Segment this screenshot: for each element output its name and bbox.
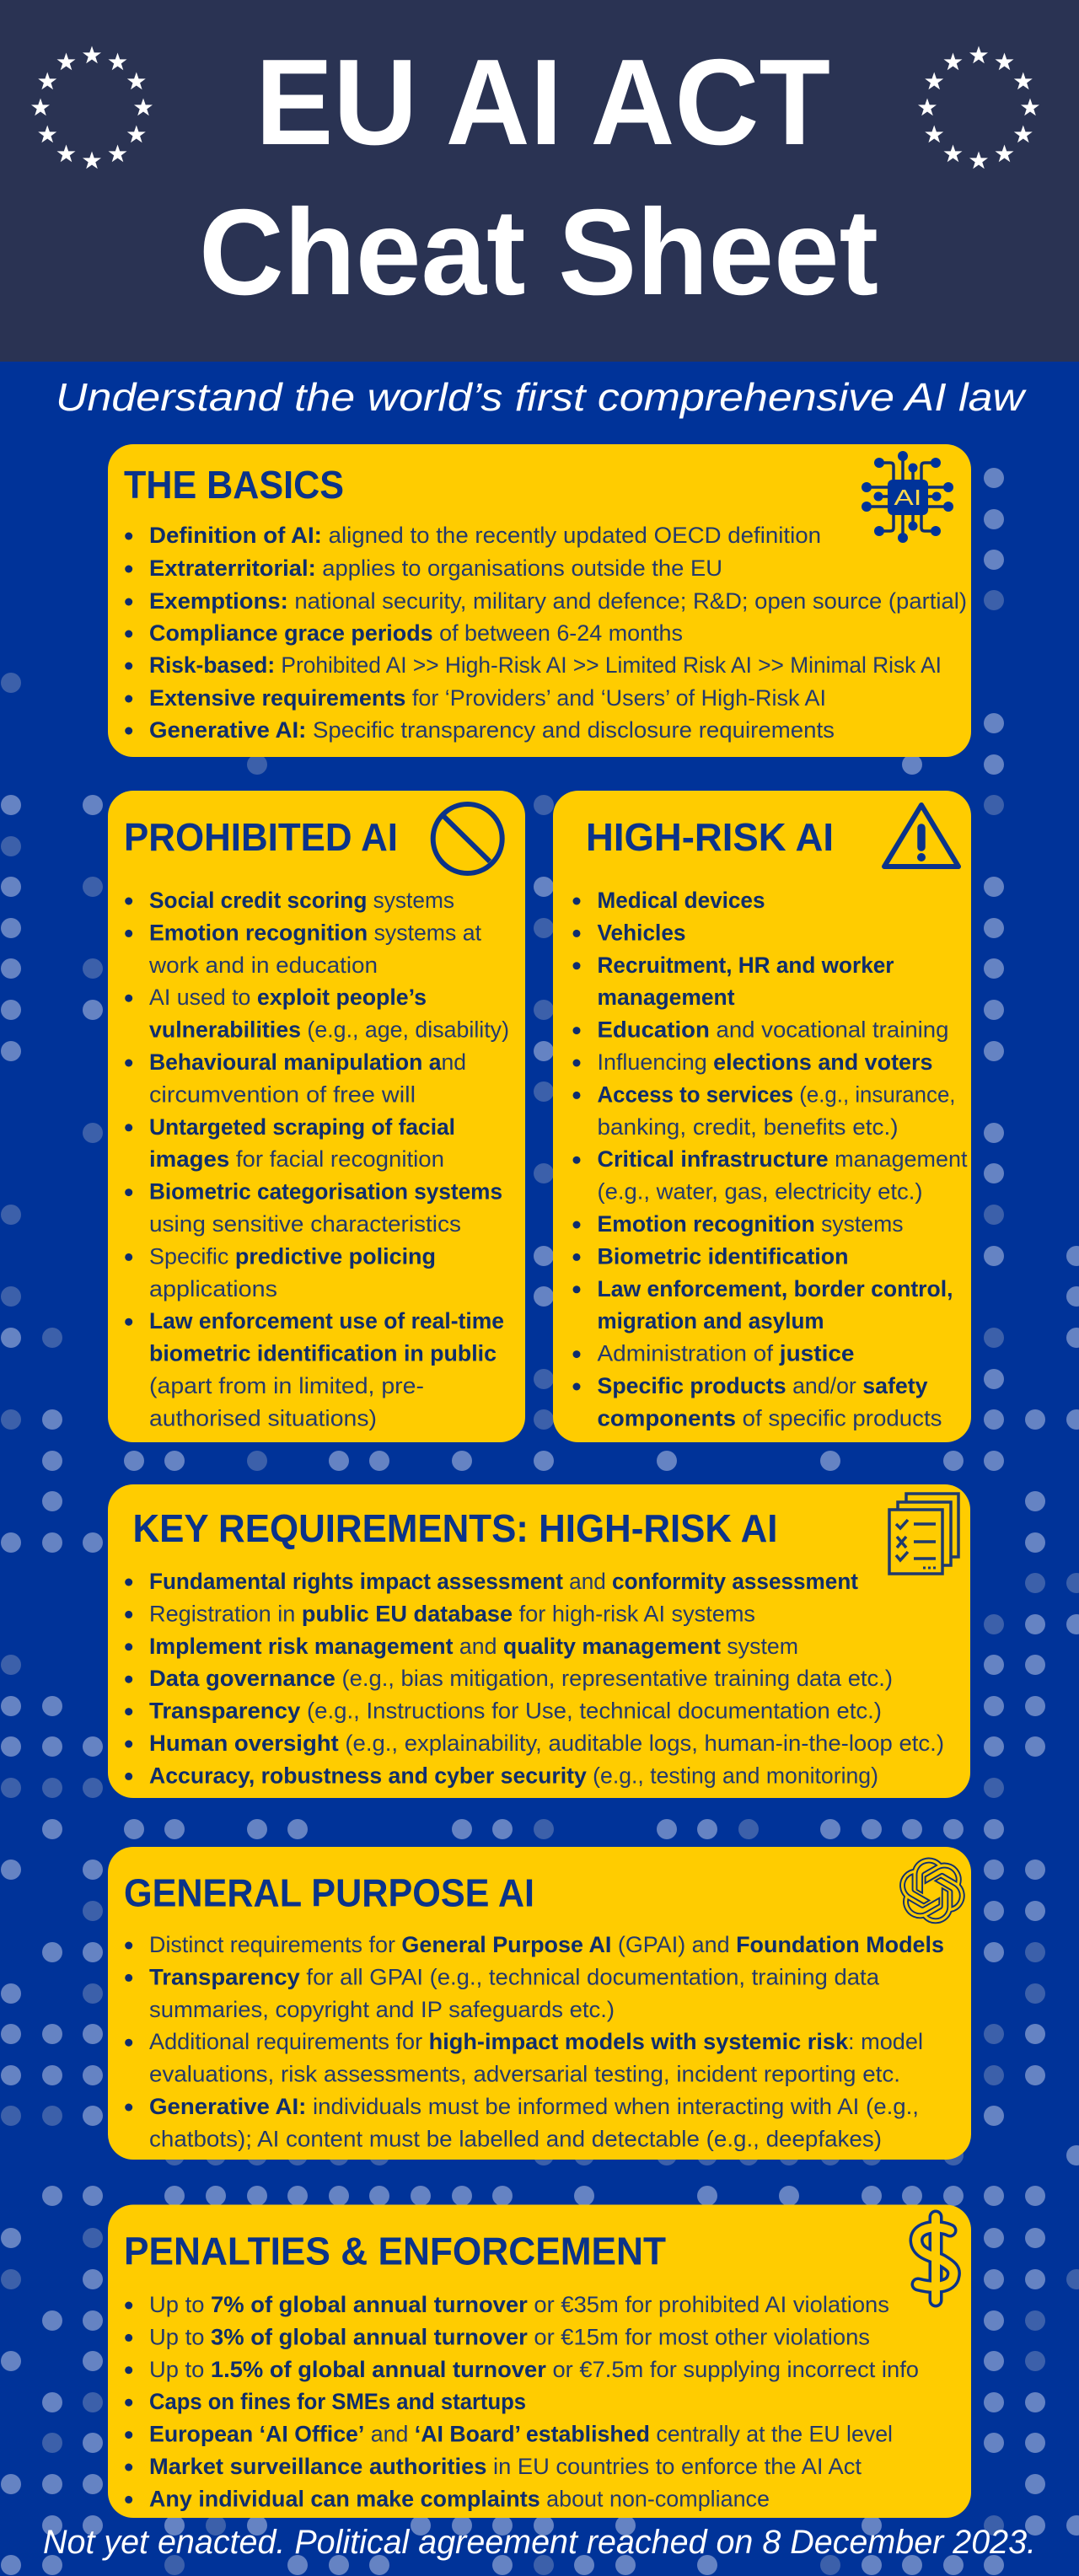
- list: high-risk AI: Biometric identification: [597, 1243, 848, 1269]
- list: the basics: Extraterritorial: applies to organisations outside the EU: [149, 555, 722, 581]
- title: [199, 34, 878, 320]
- panel: high-risk AI: [553, 791, 971, 1442]
- list: high-risk AI: Influencing elections and voters: [597, 1049, 932, 1075]
- EU stars left: [31, 46, 153, 169]
- list: the basics: Generative AI: Specific transparency and disclosure requirements: [149, 717, 835, 743]
- list: the basics: Risk-based: Prohibited AI >> High-Risk AI >> Limited Risk AI >> Minimal Risk AI: [149, 652, 942, 678]
- list: penalties and enforcement: European ‘AI Office’ and ‘AI Board’ established centrally at the EU level: [149, 2422, 893, 2447]
- list: prohibited AI: AI used to exploit people’s: [149, 985, 427, 1010]
- icon: checklist documents: [889, 1494, 958, 1574]
- heading: high-risk AI: HIGH-RISK AI: [586, 815, 834, 859]
- EU stars right: [918, 46, 1039, 169]
- list: the basics: Extensive requirements for ‘Providers’ and ‘Users’ of High-Risk AI: [149, 685, 826, 711]
- title: EU AI ACT: [255, 34, 830, 170]
- list: key requirements: Human oversight (e.g., explainability, auditable logs, human-in-the-loop etc.): [149, 1731, 944, 1756]
- list: prohibited AI: images for facial recognition: [149, 1146, 444, 1172]
- list: prohibited AI: Social credit scoring systems: [149, 888, 454, 913]
- icon: AI chip: AI: [894, 485, 922, 510]
- list: key requirements: Registration in public EU database for high-risk AI systems: [149, 1601, 755, 1626]
- list: high-risk AI: Law enforcement, border control,: [597, 1276, 953, 1301]
- icon: AI chip: [862, 451, 953, 543]
- panel: penalties and enforcement: [108, 2205, 971, 2518]
- list: penalties and enforcement: Up to 7% of global annual turnover or €35m for prohibited AI violations: [149, 2292, 889, 2317]
- panel: prohibited AI: [108, 791, 525, 1442]
- icon: prohibited sign: [433, 804, 502, 873]
- list: penalties and enforcement: Market surveillance authorities in EU countries to enforce the AI Act: [149, 2454, 862, 2479]
- icon: knot logo: [900, 1858, 964, 1923]
- heading: general purpose AI: GENERAL PURPOSE AI: [124, 1871, 534, 1915]
- list: penalties and enforcement: Up to 1.5% of global annual turnover or €7.5m for supplying incorrect info: [149, 2357, 919, 2382]
- panel: the basics: [108, 444, 971, 757]
- list: the basics: Compliance grace periods of between 6-24 months: [149, 620, 683, 646]
- heading: the basics: THE BASICS: [124, 463, 344, 507]
- list: penalties and enforcement: Up to 3% of global annual turnover or €15m for most other violations: [149, 2324, 870, 2349]
- list: penalties and enforcement: [125, 2292, 919, 2511]
- list: high-risk AI: Education and vocational training: [597, 1017, 949, 1043]
- heading: prohibited AI: PROHIBITED AI: [124, 815, 398, 859]
- heading: key requirements: KEY REQUIREMENTS: HIGH-RISK AI: [133, 1506, 777, 1550]
- list: high-risk AI: Emotion recognition systems: [597, 1211, 904, 1237]
- list: prohibited AI: Untargeted scraping of facial: [149, 1114, 455, 1140]
- list: general purpose AI: summaries, copyright and IP safeguards etc.): [149, 1997, 615, 2022]
- list: high-risk AI: Vehicles: [597, 920, 686, 945]
- list: prohibited AI: vulnerabilities (e.g., age, disability): [149, 1017, 509, 1043]
- list: key requirements: Accuracy, robustness and cyber security (e.g., testing and monitoring): [149, 1763, 878, 1788]
- list: high-risk AI: (e.g., water, gas, electricity etc.): [597, 1179, 922, 1205]
- footer note: Not yet enacted. Political agreement reached on 8 December 2023.: [43, 2524, 1036, 2561]
- list: general purpose AI: Distinct requirements for General Purpose AI (GPAI) and Foundation Models: [149, 1932, 944, 1957]
- list: high-risk AI: Medical devices: [597, 888, 765, 913]
- list: prohibited AI: Specific predictive policing: [149, 1243, 436, 1269]
- list: general purpose AI: chatbots); AI content must be labelled and detectable (e.g., deepfakes): [149, 2126, 882, 2151]
- list: prohibited AI: using sensitive characteristics: [149, 1211, 461, 1237]
- list: general purpose AI: [125, 1932, 944, 2151]
- list: prohibited AI: (apart from in limited, pre-: [149, 1373, 424, 1398]
- list: prohibited AI: applications: [149, 1276, 277, 1301]
- list: general purpose AI: Generative AI: individuals must be informed when interacting with AI (e.g.,: [149, 2094, 919, 2119]
- list: high-risk AI: Specific products and/or safety: [597, 1373, 928, 1398]
- list: penalties and enforcement: Any individual can make complaints about non-compliance: [149, 2486, 770, 2511]
- list: high-risk AI: migration and asylum: [597, 1308, 824, 1334]
- title: Cheat Sheet: [199, 184, 878, 320]
- list: high-risk AI: Access to services (e.g., insurance,: [597, 1081, 956, 1107]
- list: general purpose AI: Additional requirements for high-impact models with systemic risk : model: [149, 2029, 923, 2054]
- list: key requirements: Data governance (e.g., bias mitigation, representative training data etc.): [149, 1666, 893, 1691]
- list: high-risk AI: Administration of justice: [597, 1341, 855, 1366]
- list: prohibited AI: Behavioural manipulation and: [149, 1049, 466, 1075]
- list: the basics: Definition of AI: aligned to the recently updated OECD definition: [149, 523, 821, 548]
- list: key requirements: Transparency (e.g., Instructions for Use, technical documentation etc.): [149, 1699, 882, 1724]
- list: high-risk AI: Recruitment, HR and worker: [597, 953, 894, 978]
- header band: [0, 0, 1079, 362]
- icon: warning triangle: [884, 805, 958, 867]
- list: high-risk AI: Critical infrastructure management: [597, 1146, 968, 1172]
- list: high-risk AI: management: [597, 985, 735, 1010]
- list: high-risk AI: components of specific products: [597, 1405, 942, 1430]
- panel: key requirements: [108, 1484, 970, 1798]
- list: prohibited AI: biometric identification in public: [149, 1341, 497, 1366]
- panel: general purpose AI: [108, 1847, 971, 2160]
- list: prohibited AI: circumvention of free will: [149, 1081, 416, 1107]
- list: key requirements: [125, 1569, 944, 1788]
- list: prohibited AI: Law enforcement use of real-time: [149, 1308, 504, 1334]
- list: high-risk AI: banking, credit, benefits etc.): [597, 1114, 899, 1140]
- list: prohibited AI: work and in education: [148, 953, 378, 978]
- list: penalties and enforcement: Caps on fines for SMEs and startups: [149, 2389, 526, 2414]
- list: general purpose AI: evaluations, risk assessments, adversarial testing, incident reporting etc.: [149, 2062, 900, 2087]
- list: prohibited AI: Biometric categorisation systems: [149, 1179, 502, 1205]
- list: general purpose AI: Transparency for all GPAI (e.g., technical documentation, training data: [149, 1964, 879, 1989]
- icon: dollar sign: [916, 2217, 953, 2300]
- list: prohibited AI: authorised situations): [149, 1405, 377, 1430]
- list: the basics: [125, 523, 967, 743]
- list: high-risk AI: [573, 888, 968, 1430]
- list: prohibited AI: [125, 888, 509, 1430]
- list: the basics: Exemptions: national security, military and defence; R&D; open source (partial): [149, 588, 967, 614]
- list: key requirements: Implement risk management and quality management system: [149, 1634, 798, 1659]
- subtitle: Understand the world’s first comprehensive AI law: [56, 375, 1027, 419]
- heading: penalties and enforcement: PENALTIES & ENFORCEMENT: [124, 2229, 666, 2273]
- list: key requirements: Fundamental rights impact assessment and conformity assessment: [149, 1569, 858, 1594]
- list: prohibited AI: Emotion recognition systems at: [149, 920, 482, 945]
